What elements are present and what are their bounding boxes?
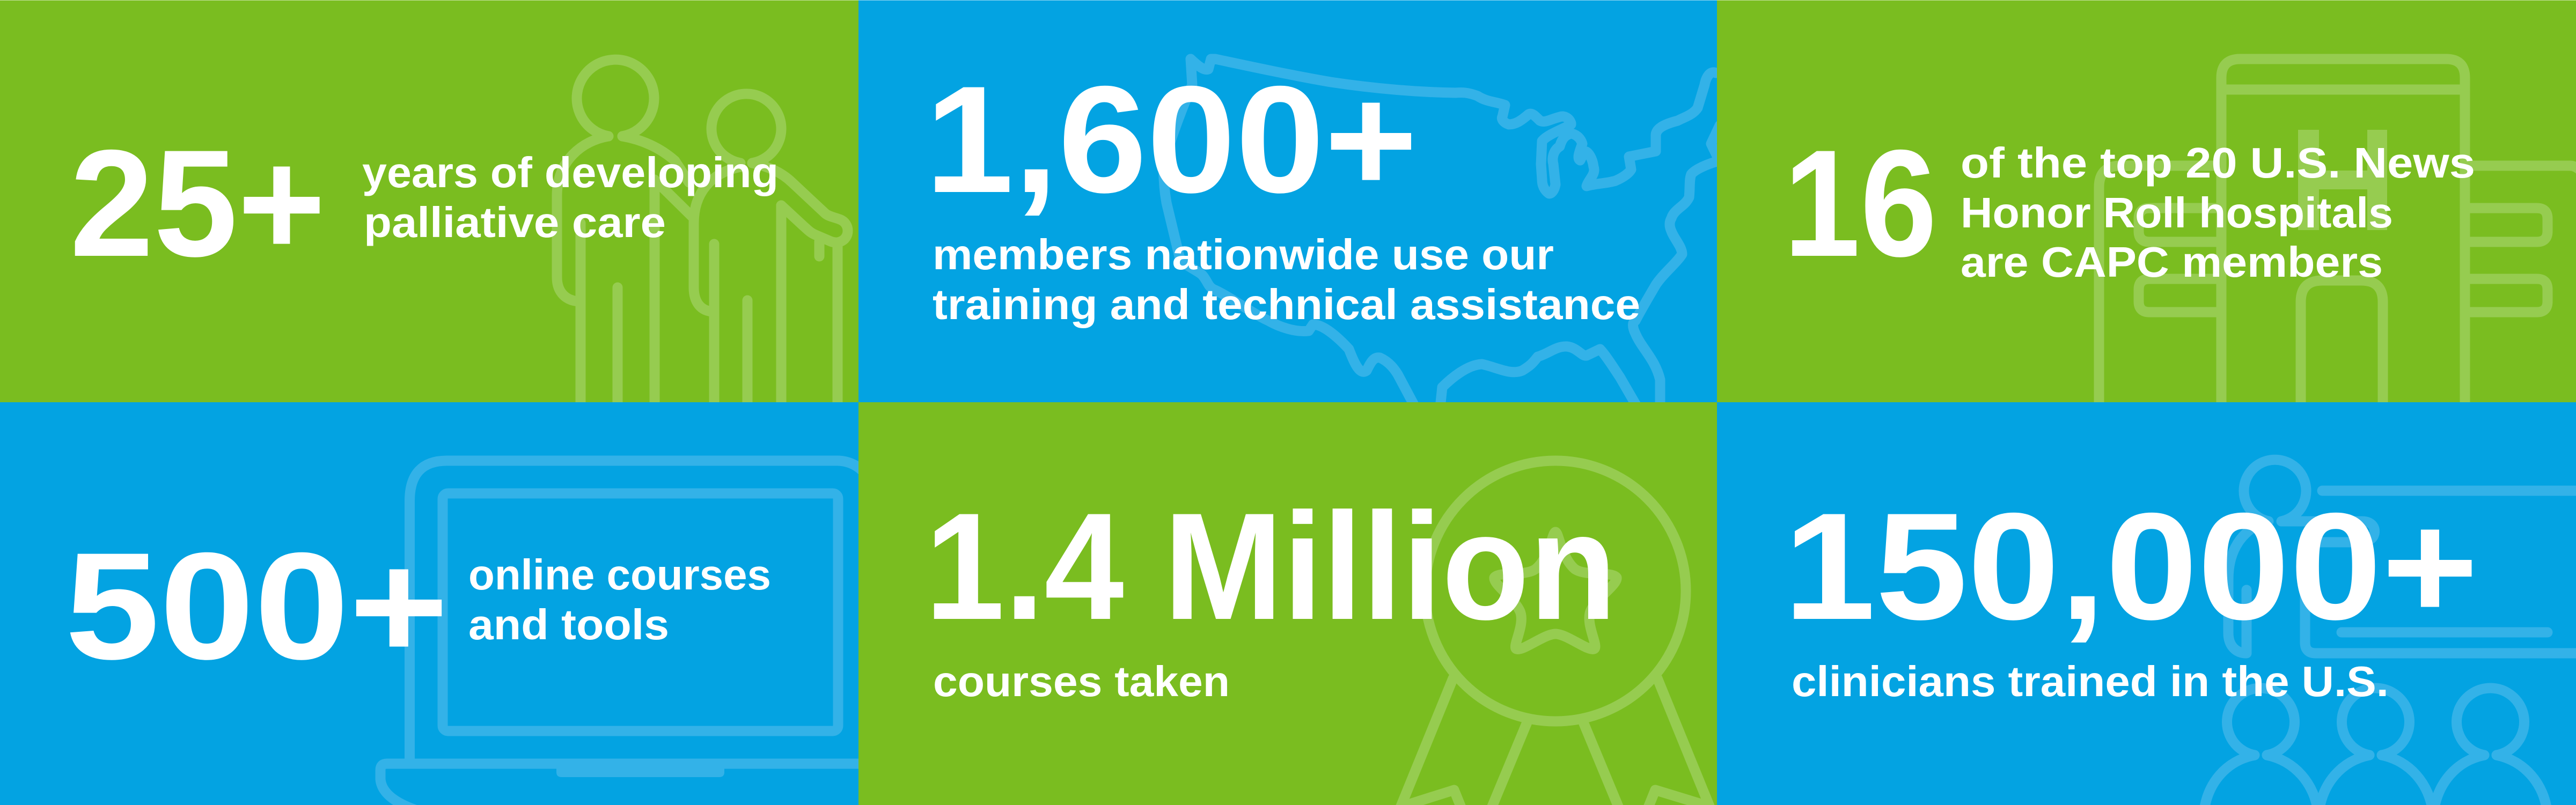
icon: hospital building	[2099, 59, 2576, 408]
panel: 25+ years	[0, 0, 858, 408]
text: of the top 20 U.S. News Honor Roll hospitals are CAPC members: of the top 20 U.S. News	[1961, 139, 2475, 187]
stat: 25+: 25+	[70, 119, 326, 289]
text: years of developing palliative care: palliative care	[364, 198, 666, 246]
text: members nationwide use our training and technical assistance: members nationwide use our	[933, 231, 1554, 278]
panel: 1,600+ members	[858, 0, 1720, 408]
panel: 150,000+ clinicians	[1717, 402, 2576, 805]
stat: 500+: 500+	[65, 521, 449, 691]
icon: map of the United States	[1164, 59, 1720, 408]
text: online courses and tools: and tools	[468, 601, 669, 648]
panel: 1.4 million courses	[858, 402, 1717, 805]
icon: award ribbon with star	[1395, 461, 1715, 805]
stat: 150,000+: 150,000+	[1784, 482, 2478, 652]
text: courses taken: courses taken	[933, 658, 1230, 705]
text: years of developing palliative care	[362, 149, 779, 246]
stat: 1.4 Million: 1.4 Million	[925, 482, 1617, 652]
text: members nationwide use our training and technical assistance: training and technical assistance	[933, 280, 1640, 328]
text: online courses and tools: online courses	[468, 551, 771, 599]
text: years of developing palliative care: years of developing	[362, 149, 779, 196]
icon: laptop	[380, 461, 872, 805]
panel: 16 of top 20 hospitals	[1717, 0, 2576, 408]
stat: 1,600+: 1,600+	[925, 55, 1418, 225]
text: of the top 20 U.S. News Honor Roll hospitals are CAPC members: Honor Roll hospitals	[1961, 189, 2393, 237]
text: of the top 20 U.S. News Honor Roll hospitals are CAPC members: are CAPC members	[1961, 238, 2383, 286]
icon: presenter and audience	[2204, 460, 2576, 805]
stat: 16: 16	[1784, 119, 1937, 289]
text: members nationwide use our training and technical assistance	[933, 231, 1640, 328]
text: clinicians trained in the U.S.: clinicians trained in the U.S.	[1792, 658, 2389, 705]
text: online courses and tools	[468, 551, 771, 648]
panel: 500+ courses	[0, 402, 872, 805]
text: of the top 20 U.S. News Honor Roll hospitals are CAPC members	[1961, 139, 2475, 286]
icon: two people, one with a cane	[557, 60, 848, 408]
